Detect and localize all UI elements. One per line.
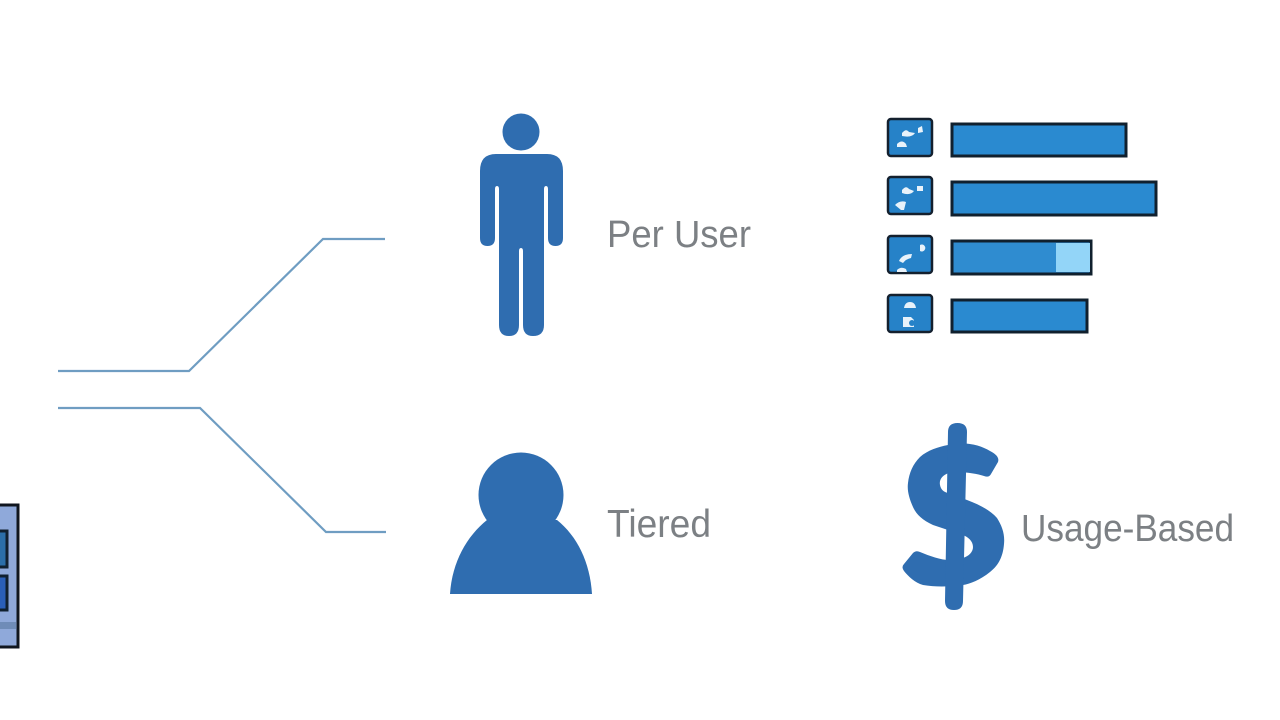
chart: horizontal bars with icons [888,119,1156,332]
icon: cropped panel at left edge [0,505,18,647]
icon: bust person [450,452,592,594]
label: Usage-Based: Usage-Based [1021,508,1234,550]
icon: dollar sign [902,423,1004,610]
label: Tiered: Tiered [607,503,711,546]
connector: upper branch to Per User [58,239,385,371]
bar row 3 [888,236,1091,274]
connector: lower branch to Tiered [58,408,386,532]
label: Per User: Per User [607,214,751,256]
bar row 2 [888,177,1156,215]
icon: standing person [480,114,563,336]
bar row 4 [888,295,1087,332]
bar row 1 [888,119,1126,156]
